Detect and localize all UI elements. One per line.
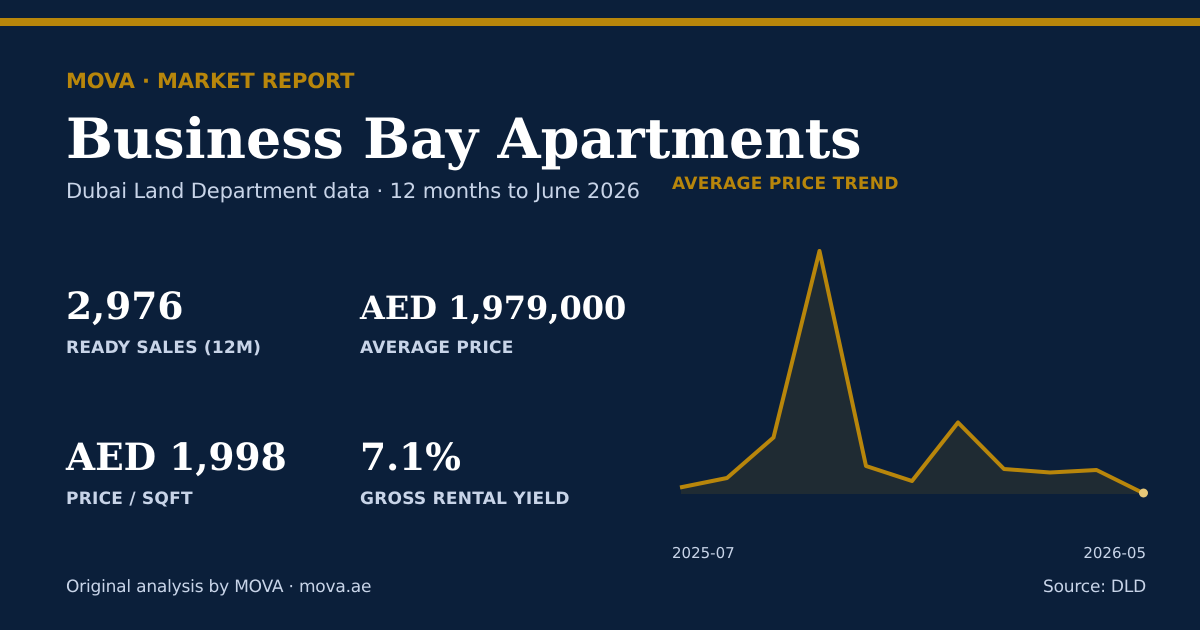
stat: average price	[360, 289, 626, 358]
value: AED 1,998	[66, 435, 287, 479]
stat: ready sales	[66, 284, 261, 358]
footer source: Source: DLD	[1043, 577, 1146, 597]
subtitle: Dubai Land Department data · 12 months to June 2026	[66, 179, 640, 203]
footer credit: Original analysis by MOVA · mova.ae	[66, 577, 371, 597]
label: READY SALES (12M)	[66, 338, 261, 358]
title: Business Bay Apartments	[66, 107, 861, 172]
axis end label: 2026-05	[1083, 544, 1146, 562]
value: 7.1%	[360, 435, 461, 479]
stat: gross rental yield	[360, 435, 570, 509]
trend line	[680, 251, 1143, 493]
eyebrow: MOVA · MARKET REPORT	[66, 69, 354, 93]
chart heading: AVERAGE PRICE TREND	[672, 174, 899, 194]
area fill	[681, 251, 1143, 494]
value: AED 1,979,000	[360, 289, 626, 327]
axis start label: 2025-07	[672, 544, 735, 562]
label: GROSS RENTAL YIELD	[360, 489, 570, 509]
value: 2,976	[66, 284, 183, 328]
label: PRICE / SQFT	[66, 489, 193, 509]
latest point marker	[1139, 488, 1148, 498]
top accent bar	[0, 18, 1200, 26]
label: AVERAGE PRICE	[360, 338, 514, 358]
stat: price per sqft	[66, 435, 287, 509]
